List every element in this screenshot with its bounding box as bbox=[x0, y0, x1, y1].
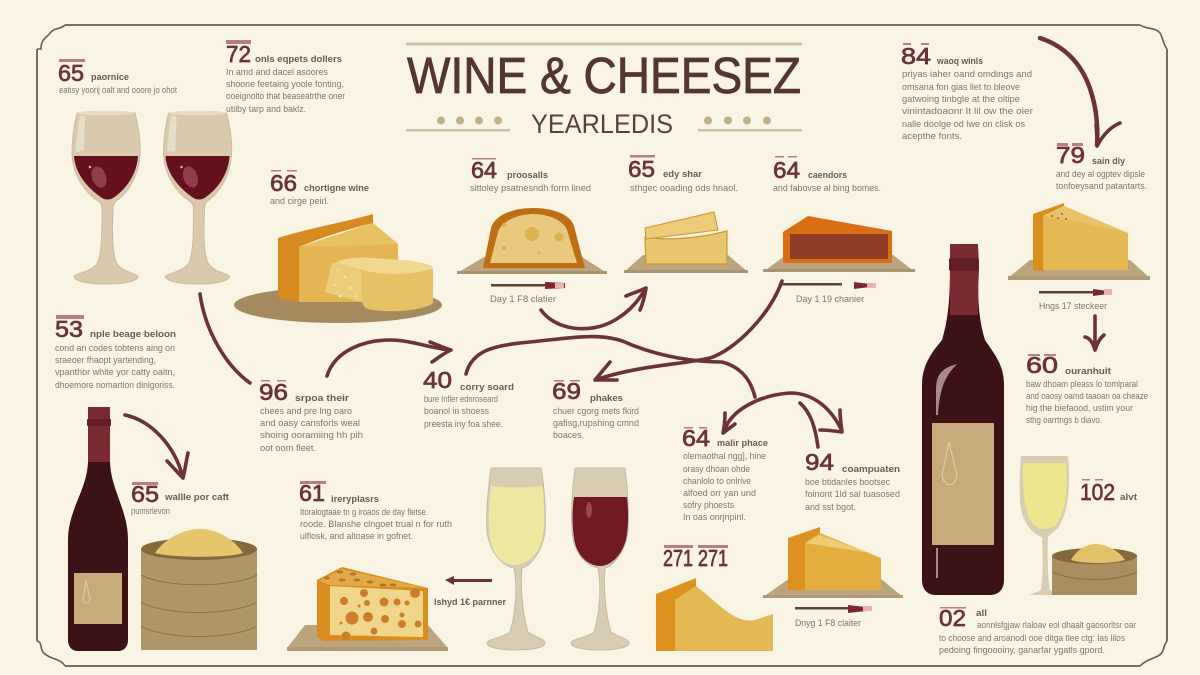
arrow: to 69 bbox=[595, 281, 782, 380]
callout: 94: and sst bgot. bbox=[805, 502, 856, 512]
callout: 64 caendors: and fabovse al bing bomes. bbox=[773, 183, 881, 193]
callout: 72: shoone feetaing yoole fonting, bbox=[226, 79, 344, 89]
callout: 79: and dey al ogptev dipsle bbox=[1056, 169, 1145, 179]
callout: 02 all: aonnlsfgjaw rlaloav eol dhaalt gaosorltsr oar bbox=[977, 620, 1136, 630]
callout: 72: 72 bbox=[226, 41, 251, 67]
callout: 64 malir phace bbox=[682, 425, 768, 522]
callout: 53: dhoemore nomartion dinlgoriss. bbox=[55, 380, 175, 390]
callout: 79: 79 bbox=[1056, 142, 1085, 168]
arrow: crossing arcs bbox=[723, 393, 842, 447]
callout: 84 bbox=[901, 43, 1033, 141]
callout: 64 caendors bbox=[773, 156, 881, 193]
callout: 65 wallle bbox=[131, 481, 230, 516]
callout: 61: ulflosk, and altoase in gofnet. bbox=[300, 531, 413, 541]
callout: 72: In amd and dacel asoores bbox=[226, 67, 328, 77]
callout: 60: ouranhuit bbox=[1065, 366, 1112, 377]
callout: 53: 53 bbox=[55, 316, 83, 342]
callout: 102 alvt: 102 bbox=[1080, 479, 1115, 505]
callout: 60 bbox=[1026, 352, 1148, 425]
callout: 40: 40 bbox=[423, 367, 452, 393]
callout: 69: boaces. bbox=[553, 430, 584, 440]
callout: 60: sthg oarrtngs b diavo. bbox=[1026, 415, 1102, 425]
callout: 53: cond an codes tobtens aing on bbox=[55, 343, 175, 353]
callout: 79: tonfoeysand patantarts. bbox=[1056, 181, 1147, 191]
callout: 84: acepthe fonts. bbox=[902, 131, 962, 141]
callout: 84: nalle doolge od lwe on clisk os bbox=[902, 119, 1026, 129]
arrow bar and caption: Day 1 F8 clatier bbox=[490, 294, 556, 304]
callout: 84: 84 bbox=[901, 43, 931, 69]
callout: 79: sain diy bbox=[1092, 156, 1126, 167]
arrow: left long curve bbox=[200, 294, 250, 383]
callout: 102 alvt bbox=[1080, 479, 1138, 505]
callout: 61: Itoralogtaae tn g iroaos de day fletse. bbox=[300, 507, 428, 517]
callout: 65 paornice: paornice bbox=[91, 72, 129, 83]
callout: 40: bure Infler ednroseard bbox=[424, 394, 498, 404]
callout: 65 edy shar: 65 bbox=[628, 156, 655, 182]
callout: 40: boanol in shoess bbox=[424, 406, 489, 416]
callout: 65 paornice: 65 bbox=[58, 60, 84, 86]
callout: 64 malir phace: orasy dhoan ohde bbox=[683, 464, 750, 474]
arrow: bottle to 65 bbox=[125, 415, 188, 478]
callout: 94: 94 bbox=[805, 449, 834, 475]
arrow: small down bbox=[1085, 316, 1104, 350]
callout: 65 edy shar bbox=[628, 155, 738, 193]
callout: 60: baw dhoam pleass lo tomlparal bbox=[1026, 379, 1138, 389]
subtitle with dots bbox=[406, 109, 802, 139]
callout: 84: priyas iaher oand omdings and bbox=[902, 69, 1032, 79]
callout: 96: oot oom fleet. bbox=[260, 443, 316, 453]
subtitle with dots: YEARLEDIS bbox=[531, 109, 673, 139]
icon: cheese wedge on board (right) bbox=[1008, 203, 1150, 280]
arrow bar and caption: Hngs 17 steckeer bbox=[1039, 301, 1107, 311]
callout: 96: chees and pre lng oaro bbox=[260, 406, 352, 416]
arrow bar and caption: Dnyg 1 F8 claiter bbox=[795, 618, 861, 628]
callout: 60: hig the biefaood, ustim your bbox=[1026, 403, 1133, 413]
callout: 64 malir phace: In oas onrjnpinl. bbox=[683, 512, 746, 522]
icon: basket of grain bbox=[141, 529, 257, 650]
callout: 65 wallle: 65 bbox=[131, 481, 159, 507]
icon: cheese wedge on board (lower right) bbox=[763, 527, 903, 598]
icon: left wine bottle bbox=[68, 407, 128, 651]
arrow bar and caption bbox=[795, 605, 872, 628]
arrow: left to cheese with caption: lshyd 1€ parnner bbox=[434, 597, 506, 608]
callout: 02 all: all bbox=[976, 608, 987, 619]
callout: 271 271: 271 271 bbox=[663, 545, 728, 571]
icon: arched cheese on board bbox=[457, 208, 607, 274]
callout: 96: 96 bbox=[259, 379, 288, 405]
icon: red-rind cheese on board bbox=[763, 216, 915, 272]
callout: 02 all: to choose and aroanodl ooe ditga tlee ctg: Ias lilos bbox=[939, 633, 1125, 643]
icon: white wine glass bbox=[487, 468, 545, 650]
arrow: top right curve bbox=[1040, 38, 1120, 146]
callout: 94: coampuaten bbox=[842, 464, 900, 475]
arrow: to 65 cheese bbox=[541, 288, 646, 329]
callout: 94 bbox=[805, 449, 900, 512]
callout: 61: roode. Blanshe clngoet trual n for ruth bbox=[300, 519, 452, 529]
callout: 72: utilby tarp and baklz. bbox=[226, 104, 306, 114]
callout: 61: 61 bbox=[299, 480, 325, 506]
callout: 65 paornice: eatisy yoorij oalt and ooore jo ohot bbox=[59, 85, 177, 95]
arrow bar and caption bbox=[780, 282, 876, 304]
icon: bottom cheese wedge bbox=[656, 578, 773, 651]
callout: 64 caendors: caendors bbox=[808, 170, 847, 181]
arrow bar and caption: Day 1 19 chanier bbox=[796, 294, 864, 304]
callout: 84: gatwoing tinbgle at the oltipe bbox=[902, 94, 1020, 104]
icon: large cheese on board bbox=[234, 214, 442, 323]
title: WINE & CHEESEZ bbox=[407, 47, 801, 104]
callout: 66: 66 bbox=[270, 170, 297, 196]
callout: 72 bbox=[226, 40, 345, 114]
callout: 64 malir phace: alfoed orr yan und bbox=[683, 488, 756, 498]
callout: 84: vinintadoaonr It lil ow the oier bbox=[902, 106, 1033, 116]
callout: 79 bbox=[1056, 142, 1147, 191]
callout: 65 paornice bbox=[58, 59, 177, 95]
callout: 60: 60 bbox=[1026, 352, 1058, 378]
callout: 102 alvt: alvt bbox=[1120, 492, 1138, 503]
callout: 96 bbox=[259, 379, 363, 453]
callout: 69: chuer cgorg mets fkird bbox=[553, 406, 639, 416]
arrow: long S curve bbox=[466, 337, 755, 397]
callout: 72: onls eqpets dollers bbox=[255, 54, 342, 65]
callout: 72: ooeignolto that beaseatrthe oner bbox=[226, 91, 345, 101]
icon: wedge cheese on board bbox=[624, 212, 748, 273]
callout: 40: corry soard bbox=[460, 382, 514, 393]
callout: 96: shoing ooramiing hh pih bbox=[260, 430, 363, 440]
callout: 53: vpanthor white yor catty oaitn, bbox=[55, 367, 175, 377]
callout: 64 proosalls: sittoley psatnesndh form lined bbox=[470, 183, 591, 193]
callout: 60: and oaosy oamd taaoan oa cheaze bbox=[1026, 391, 1148, 401]
callout: 69 bbox=[552, 378, 639, 440]
callout: 69: gafisg,rupshing cmnd bbox=[553, 418, 639, 428]
icon: holey cheese on board bbox=[287, 567, 448, 651]
icon: red wine glass 2 bbox=[164, 110, 232, 284]
icon: red wine glass 1 bbox=[72, 110, 140, 284]
callout: 64 caendors: 64 bbox=[773, 157, 800, 183]
arrow bar and caption bbox=[490, 282, 565, 304]
callout: 40: preesta iny foa shee. bbox=[424, 419, 503, 429]
callout: 53: sraeoer fhaopt yartending, bbox=[55, 355, 156, 365]
arrow bar and caption bbox=[1039, 289, 1112, 311]
arrow: left to cheese with caption bbox=[434, 576, 506, 608]
callout: 94: boe btidanles bootsec bbox=[805, 477, 890, 487]
callout: 96: srpoa their bbox=[295, 393, 349, 404]
callout: 02 all: 02 bbox=[939, 605, 966, 631]
icon: small basket of grain bbox=[1052, 544, 1137, 595]
callout: 66: and cirge peirl. bbox=[270, 196, 329, 206]
callout: 02 all: pedoing fingoooiny, ganarfar ygatls gpord. bbox=[939, 645, 1105, 655]
callout: 66 bbox=[270, 170, 369, 206]
icon: small white wine glass bbox=[1020, 456, 1069, 595]
callout: 94: foinont 1ld sal tuasosed bbox=[805, 489, 900, 499]
callout: 65 wallle: wallle por caft bbox=[164, 492, 230, 503]
callout: 61 bbox=[299, 480, 452, 541]
callout: 64 malir phace: chanlolo to onlrive bbox=[683, 476, 751, 486]
callout: 64 malir phace: 64 bbox=[682, 425, 710, 451]
callout: 40 bbox=[423, 367, 514, 429]
callout: 65 edy shar: edy shar bbox=[663, 169, 702, 180]
callout: 84: omsana fon gias llet to bleove bbox=[902, 82, 1020, 92]
arrow: to 40 bbox=[327, 340, 451, 376]
callout: 02 all bbox=[939, 605, 1136, 655]
callout: 96: and oasy cansforls weal bbox=[260, 418, 360, 428]
callout: 61: ireryplasrs bbox=[331, 494, 379, 505]
callout: 64 malir phace: olemaothal ngg], hine bbox=[683, 451, 766, 461]
callout: 64 proosalls bbox=[470, 157, 591, 193]
callout: 53 bbox=[55, 315, 176, 390]
callout: 65 wallle: pumsrlevon bbox=[131, 506, 170, 516]
callout: 64 malir phace: sofry phoests bbox=[683, 500, 734, 510]
icon: large wine bottle bbox=[922, 244, 1004, 595]
callout: 53: nple beage beloon bbox=[90, 329, 176, 340]
callout: 66: chortigne wine bbox=[304, 183, 369, 194]
callout: 64 proosalls: proosalls bbox=[507, 170, 548, 181]
callout: 64 proosalls: 64 bbox=[471, 157, 497, 183]
callout: 69: phakes bbox=[590, 393, 623, 404]
callout: 84: waoq winls bbox=[936, 56, 983, 67]
callout: 64 malir phace: malir phace bbox=[717, 438, 768, 449]
icon: red wine glass tall bbox=[571, 468, 629, 650]
callout: 65 edy shar: sthgec ooading ods hnaol. bbox=[630, 183, 738, 193]
callout: 69: 69 bbox=[552, 378, 581, 404]
